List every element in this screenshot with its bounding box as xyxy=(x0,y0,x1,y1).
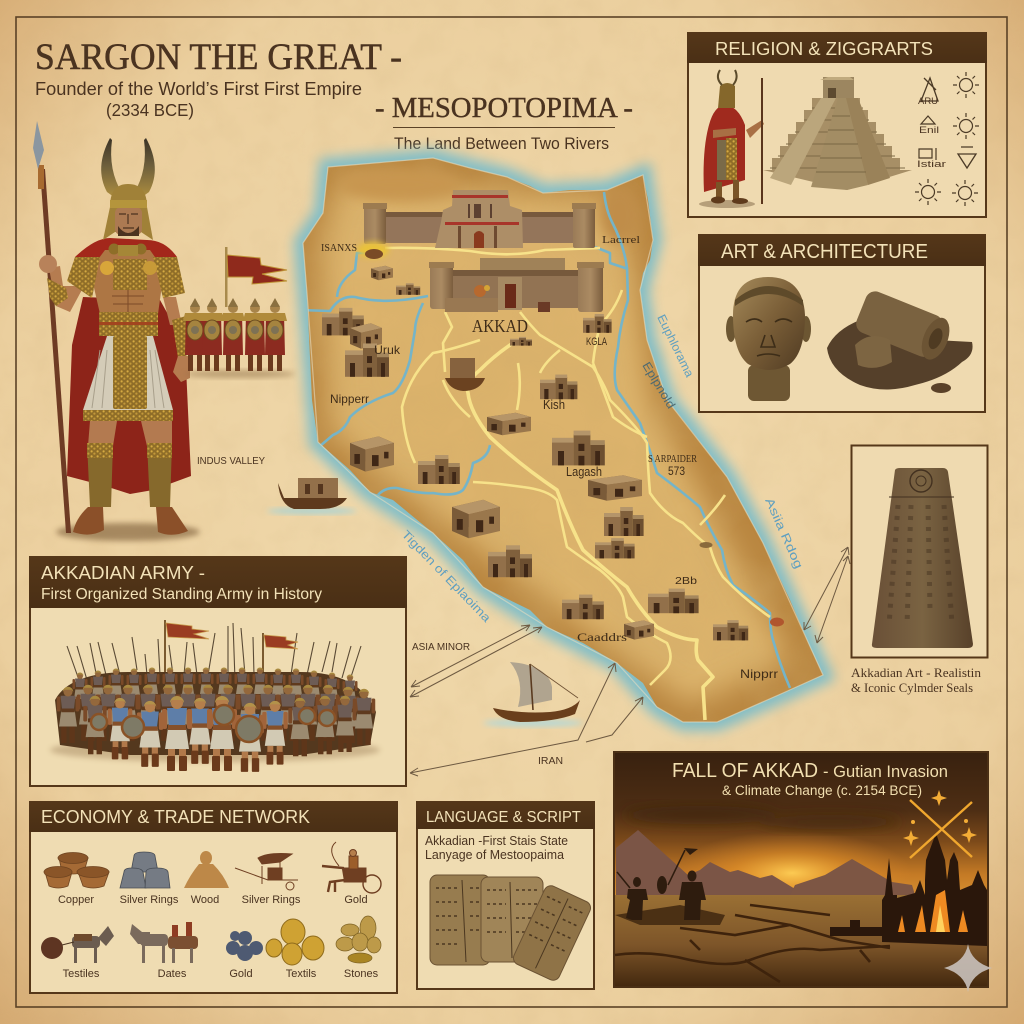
sunset glow xyxy=(672,831,912,915)
icon: priest figure xyxy=(699,70,764,208)
burning city xyxy=(830,833,987,946)
heading: ECONOMY & TRADE NETWORK xyxy=(41,807,310,827)
economy labels: Wood xyxy=(191,894,219,906)
star burst: gold site xyxy=(357,242,389,258)
icon: silver rings xyxy=(120,852,170,888)
description: Lanyage of Mestoopaima xyxy=(425,848,564,862)
economy labels: Gold xyxy=(229,968,253,980)
shoulder armour xyxy=(67,244,185,298)
coast edge highlight xyxy=(303,158,823,722)
label: Indus Valley: INDUS VALLEY xyxy=(197,455,265,467)
map place labels xyxy=(321,234,806,681)
map place labels: Lagash xyxy=(566,465,602,479)
icon: wagon xyxy=(235,854,298,890)
deity symbols xyxy=(915,72,979,206)
title: Sargon the Great: Founder of the World’s First First Empire xyxy=(35,78,362,99)
map place labels: Nipprr xyxy=(740,667,778,681)
horned helmet and face xyxy=(101,138,155,240)
rivers xyxy=(300,192,790,688)
red cape xyxy=(67,297,191,494)
icon: golden stones xyxy=(336,916,381,963)
kilt panel xyxy=(113,336,147,409)
gold belt xyxy=(99,312,158,336)
title: Sargon the Great: SARGON THE GREAT - xyxy=(35,37,402,78)
label: Asia Minor: ASIA MINOR xyxy=(412,641,470,653)
map place labels: Tigden of Eplaoima xyxy=(399,527,494,625)
panel: Art and Architecture xyxy=(698,234,986,412)
caption: Akkadian art xyxy=(851,665,982,695)
icon: bronze head xyxy=(726,277,811,401)
silhouette figures xyxy=(615,848,725,925)
map place labels: AKKAD xyxy=(472,316,528,336)
heading xyxy=(672,760,948,798)
map place labels: Eplpnold xyxy=(639,359,678,411)
heading: ART & ARCHITECTURE xyxy=(721,241,928,263)
heading xyxy=(41,562,322,603)
torso xyxy=(90,250,164,314)
map place labels: 573 xyxy=(668,464,685,478)
map place labels: Kish xyxy=(543,398,565,412)
economy labels xyxy=(58,894,379,980)
economy labels: Silver Rings xyxy=(242,894,301,906)
river barge xyxy=(445,358,485,391)
icon: sparkle watermark xyxy=(944,944,992,992)
map place labels: KGLA xyxy=(586,336,607,348)
figure: Sargon warrior xyxy=(33,121,200,541)
legs xyxy=(73,421,188,535)
right arm and bracer xyxy=(163,297,191,382)
palace: Akkad fortress xyxy=(429,258,604,312)
icon: cylinder seal and clay xyxy=(827,288,973,393)
heading: & Climate Change (c. 2154 BCE) xyxy=(722,783,922,798)
golden star burst xyxy=(903,790,977,858)
map place labels: S ARPAIDER xyxy=(648,453,698,465)
cracked ground xyxy=(615,895,987,986)
icon: chariot with rider xyxy=(322,842,381,893)
icon: blue stones xyxy=(226,931,263,961)
label: Iran: IRAN xyxy=(538,755,563,767)
heading: LANGUAGE & SCRIPT xyxy=(426,809,581,826)
icon: copper bowls xyxy=(44,852,109,888)
icon: donkey with load xyxy=(41,926,114,963)
panel: Religion and Ziggurats xyxy=(687,32,987,217)
land mass xyxy=(290,150,840,740)
palace: upper fortress xyxy=(363,190,596,248)
heading: RELIGION & ZIGGRARTS xyxy=(715,39,933,59)
soldiers formation xyxy=(50,668,380,772)
map place labels: 2Bb xyxy=(675,576,698,587)
heading: AKKADIAN ARMY - xyxy=(41,562,205,583)
small army group with banner xyxy=(183,247,295,378)
caption: Akkadian art: & Iconic Cylmder Seals xyxy=(851,680,973,695)
map place labels: Uruk xyxy=(374,343,401,357)
description xyxy=(425,834,568,862)
spears xyxy=(67,623,361,680)
map heading: Mesopotamia: - MESOPOTOPIMA - xyxy=(375,93,633,124)
economy labels: Copper xyxy=(58,894,94,906)
map heading: Mesopotamia xyxy=(375,93,633,153)
coastal glow xyxy=(303,158,823,722)
map of Mesopotamia xyxy=(290,150,840,740)
deity symbols: Istiar xyxy=(917,159,946,169)
description: Akkadian -First Stais State xyxy=(425,834,568,848)
economy labels: Testiles xyxy=(63,968,100,980)
economy labels: Dates xyxy=(158,968,187,980)
deity symbols: ARU xyxy=(918,96,938,106)
map place labels: ISANXS xyxy=(321,242,357,254)
panel: stele xyxy=(852,446,988,658)
map place labels: Caaddrs xyxy=(577,630,627,644)
title: Sargon the Great xyxy=(35,37,402,120)
banners xyxy=(164,620,298,683)
icon: clay tablets xyxy=(430,875,593,983)
trade roads xyxy=(385,248,770,720)
map place labels: Lacrrel xyxy=(602,234,640,246)
map place labels: Euphlorama xyxy=(654,312,697,380)
icon: ziggurat xyxy=(763,77,912,190)
economy labels: Gold xyxy=(344,894,368,906)
economy labels: Textils xyxy=(286,968,317,980)
heading: - Gutian Invasion xyxy=(823,762,948,781)
settlements xyxy=(322,242,784,640)
boat: sailing ship xyxy=(483,662,583,726)
mountains xyxy=(616,830,915,897)
banner xyxy=(227,255,287,284)
icon: gold coins xyxy=(266,919,324,965)
spear xyxy=(33,121,71,533)
title: Sargon the Great: (2334 BCE) xyxy=(106,100,194,120)
icon: inscribed stele xyxy=(872,468,973,648)
left arm and bracer xyxy=(39,255,84,312)
map place labels: Nipperr xyxy=(330,392,369,406)
icon: wood figure xyxy=(184,851,229,888)
white kilt xyxy=(83,336,173,410)
dark clouds xyxy=(625,806,900,829)
caption: Akkadian art: Akkadian Art - Realistin xyxy=(851,665,982,680)
deity symbols: Enil xyxy=(919,125,939,135)
arrows: trade routes xyxy=(410,547,850,776)
panel: Economy and Trade Network xyxy=(29,801,398,993)
economy labels: Silver Rings xyxy=(120,894,179,906)
boat: left coast xyxy=(267,478,357,514)
panel: Fall of Akkad xyxy=(614,752,988,987)
map heading: Mesopotamia: The Land Between Two Rivers xyxy=(394,135,609,153)
economy labels: Stones xyxy=(344,968,379,980)
panel: Akkadian Army xyxy=(29,556,407,786)
map place labels: Asiia Rdog xyxy=(762,496,806,571)
heading: FALL OF AKKAD xyxy=(672,760,818,782)
panel: Language and Script xyxy=(416,801,595,989)
icon: donkeys with riders xyxy=(130,922,198,963)
heading: First Organized Standing Army in History xyxy=(41,586,322,603)
